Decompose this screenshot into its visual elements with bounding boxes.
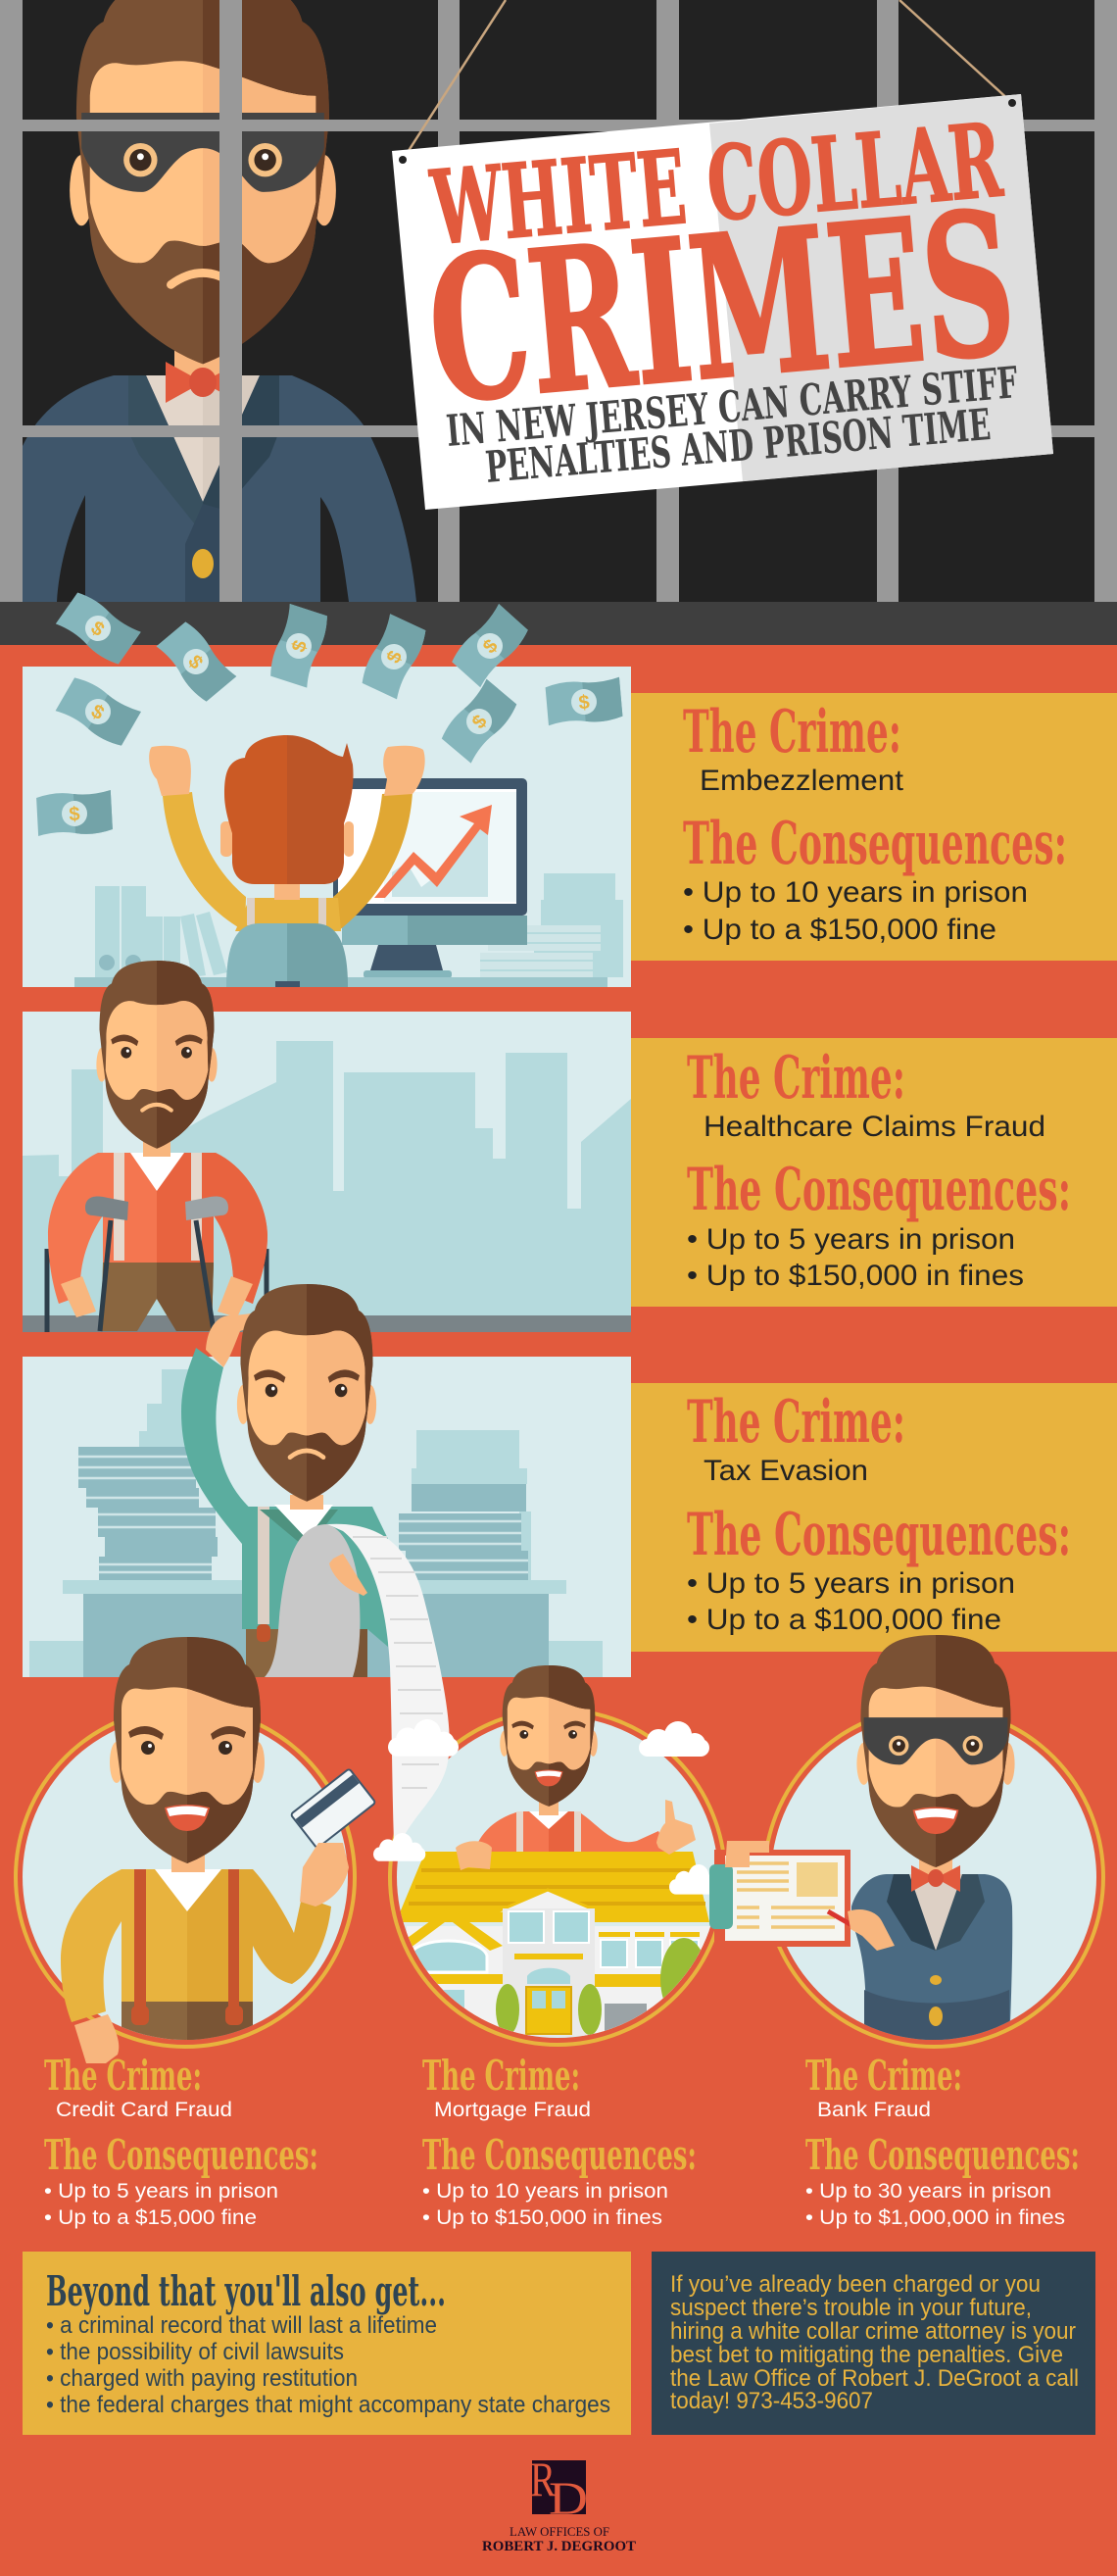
computer monitor [333,778,527,978]
text block: bank fraud: • Up to 30 years in prison [805,2180,1051,2203]
rising arrow [374,805,492,898]
panel: healthcare fraud scene [23,961,631,1332]
panel: tax evasion text [631,1383,1117,1652]
jail bars [0,0,1117,602]
text block: bank fraud: • Up to $1,000,000 in fines [805,2206,1065,2229]
crime heading: The Crime: [687,1044,905,1113]
figure: masked man with clipboard [709,1635,1015,2049]
text block: mortgage fraud: The Crime: [422,2052,580,2100]
figure: man at computer from behind [149,735,425,987]
text block: mortgage fraud: The Consequences: [422,2131,697,2179]
consequence list: • Up to 5 years in prison [687,1223,1015,1256]
text block: bank fraud [805,2052,1080,2229]
skyline [23,1041,631,1315]
figure: man with long receipt [181,1284,388,1677]
panel: healthcare fraud text [631,1038,1117,1307]
figure: masked man behind bars [23,0,416,602]
list: • the possibility of civil lawsuits [46,2339,344,2365]
panel: embezzlement text [631,693,1117,961]
consequence list [687,1567,1015,1636]
crime heading: The Crime: [687,1388,905,1457]
text block: credit card fraud: • Up to 5 years in prison [44,2180,278,2203]
text block: mortgage fraud: • Up to 10 years in prison [422,2180,668,2203]
crime heading: The Crime: [683,698,901,767]
figure: man on house [396,1665,717,2039]
heading: Beyond that you'll also get... [46,2267,446,2315]
text block: credit card fraud: • Up to a $15,000 fine [44,2206,257,2229]
text block: mortgage fraud: • Up to $150,000 in fines [422,2206,662,2229]
law office name: LAW OFFICES OF [510,2524,609,2539]
panel: call to action: If you’ve already been charged or you [670,2271,1041,2298]
crime name: Healthcare Claims Fraud [704,1111,1045,1143]
consequence list: • Up to 10 years in prison [683,876,1028,909]
panel: call to action: hiring a white collar crime attorney is your [670,2318,1076,2345]
text block: credit card fraud [44,2052,318,2229]
list [46,2312,610,2418]
logo: D [549,2473,588,2525]
list: • the federal charges that might accompany state charges [46,2392,610,2418]
consequence list: • Up to a $150,000 fine [683,914,996,946]
crime name: Embezzlement [700,765,904,797]
list: • charged with paying restitution [46,2365,358,2392]
panel: call to action: best bet to mitigating the penalties. Give [670,2342,1063,2368]
clipboard [709,1841,867,1947]
consequence list: • Up to 5 years in prison [687,1567,1015,1600]
icon: credit card [291,1768,375,1849]
consequence list: • Up to $150,000 in fines [687,1260,1024,1292]
figure: man on crutches [47,961,267,1332]
clouds [373,1719,722,1895]
crime name: Tax Evasion [704,1455,868,1487]
consequence list: • Up to a $100,000 fine [687,1604,1001,1636]
consequence list [683,876,1028,946]
panel: call to action [652,2252,1095,2435]
money bills falling [36,589,623,837]
panel: tax evasion scene [23,1357,631,1677]
house [396,1852,717,2039]
figure: man with credit card [61,1637,375,2063]
logo [482,2452,636,2554]
text block: credit card fraud: The Crime: [44,2052,202,2100]
list: • a criminal record that will last a lifetime [46,2312,437,2339]
text block: bank fraud: Bank Fraud [817,2099,931,2121]
text block: mortgage fraud: Mortgage Fraud [434,2099,591,2121]
panel: call to action: the Law Office of Robert J. DeGroot a call [670,2365,1079,2392]
circle: credit card fraud backdrop [16,1708,355,2047]
consequence list [687,1223,1024,1292]
text block: bank fraud: The Crime: [805,2052,962,2100]
circle: bank fraud backdrop [764,1708,1103,2047]
panel: beyond that [23,2252,631,2435]
hanging sign [392,0,1053,510]
text block: mortgage fraud [422,2052,697,2229]
logo: ROBERT J. DEGROOT [482,2539,636,2554]
circle: mortgage fraud backdrop [390,1709,725,2045]
panel: embezzlement scene [23,589,631,987]
jail cell backdrop [0,0,1117,602]
panel: call to action: suspect there’s trouble in your future, [670,2295,1032,2321]
text block: credit card fraud: Credit Card Fraud [56,2099,232,2121]
long receipt ribbon [327,1524,450,1848]
panel: call to action: today! 973-453-9607 [670,2388,873,2414]
dark ledge [0,602,1117,645]
text block: credit card fraud: The Consequences: [44,2131,318,2179]
logo: R [530,2452,556,2506]
